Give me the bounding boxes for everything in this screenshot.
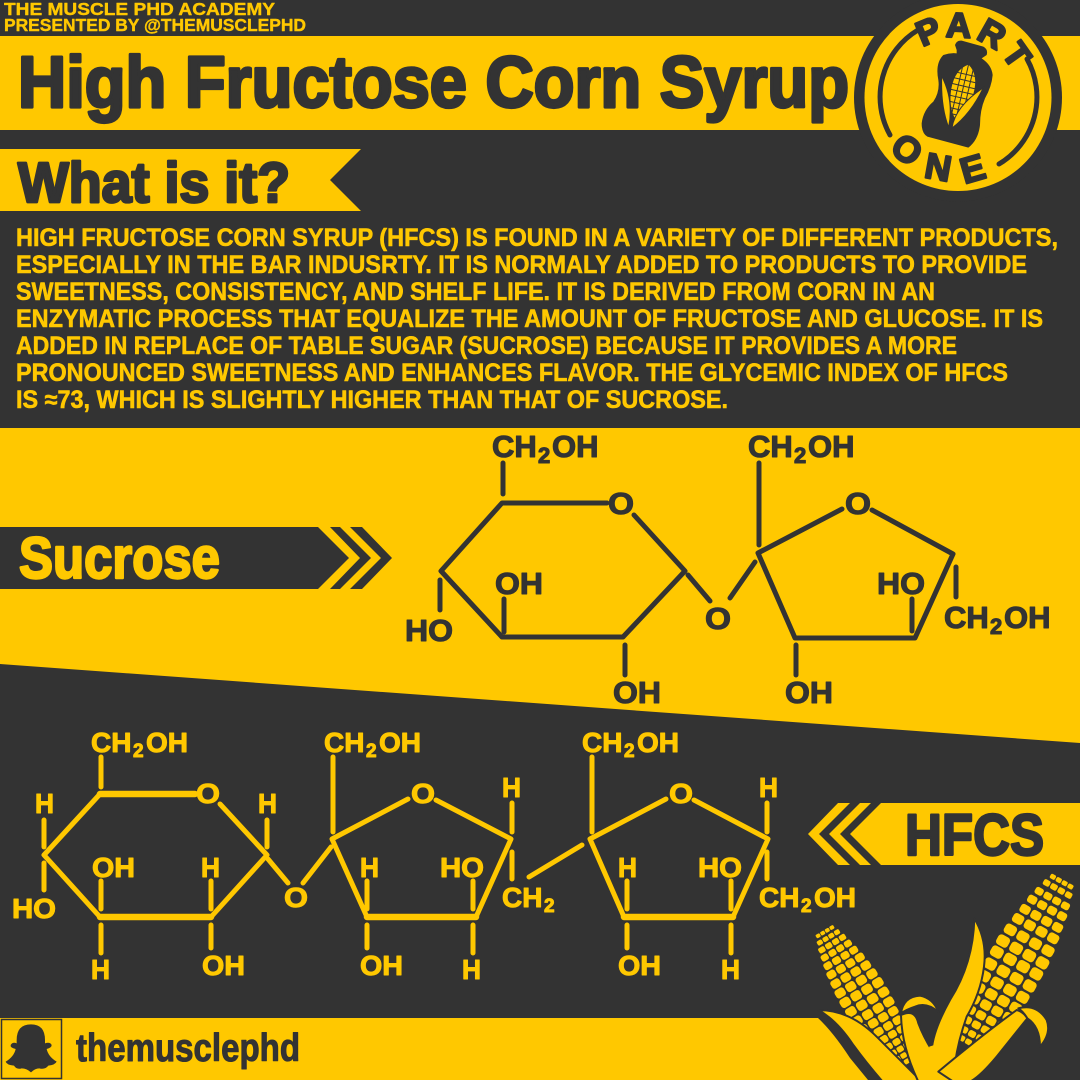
chart: sucrose molecule: OH	[785, 675, 833, 710]
chart: sucrose molecule: O	[705, 601, 731, 636]
chart: hfcs molecule: H	[91, 954, 110, 985]
chart: hfcs molecule: 2	[544, 896, 555, 917]
chart: sucrose molecule: HO	[405, 613, 453, 648]
title: High Fructose Corn Syrup	[18, 43, 849, 123]
text block: description: SWEETNESS, CONSISTENCY, AND SHELF LIFE. IT IS DERIVED FROM CORN IN AN	[16, 278, 935, 306]
chart: sucrose molecule: O	[608, 486, 634, 521]
chart: hfcs molecule: OH	[202, 950, 245, 981]
badge: part one: ONE	[892, 135, 988, 184]
chart: hfcs molecule: OH	[92, 852, 135, 883]
chart: hfcs molecule: O	[669, 778, 693, 809]
chart: hfcs molecule: H	[462, 954, 481, 985]
footer band: snapchat handle	[0, 1018, 868, 1080]
banner: sucrose label	[0, 526, 392, 591]
chart: hfcs molecule: OH	[146, 727, 188, 758]
chart: hfcs molecule: 2	[801, 896, 812, 917]
icon: syrup bottle with corn	[922, 41, 993, 148]
chart: hfcs molecule: CH	[91, 727, 131, 758]
icon: snapchat ghost	[2, 1020, 62, 1078]
chart: hfcs molecule: H	[502, 772, 521, 803]
chart: sucrose molecule: OH	[1004, 600, 1050, 635]
chart: hfcs molecule: 2	[133, 741, 144, 762]
badge: part one	[854, 4, 1062, 191]
panel: sucrose	[0, 428, 1080, 743]
chart: hfcs molecule: 2	[366, 741, 377, 762]
chart: hfcs molecule: H	[35, 788, 54, 819]
right cob	[945, 865, 1080, 1060]
chart: sucrose molecule: OH	[808, 429, 854, 464]
chart: sucrose molecule: HO	[877, 566, 925, 601]
chart: hfcs molecule: OH	[618, 950, 661, 981]
chart: hfcs molecule: CH	[582, 727, 622, 758]
chart: hfcs molecule: OH	[360, 950, 403, 981]
chart: sucrose molecule: 2	[538, 443, 550, 468]
heading: what is it: What is it?	[18, 151, 290, 215]
text block: description: ENZYMATIC PROCESS THAT EQUALIZE THE AMOUNT OF FRUCTOSE AND GLUCOSE. IT IS	[16, 305, 1043, 333]
chart: hfcs molecule: CH	[502, 882, 542, 913]
banner: hfcs label	[808, 803, 1080, 868]
chart: hfcs molecule: CH	[759, 882, 799, 913]
left cob	[803, 917, 926, 1078]
header: academy credit	[4, 0, 306, 35]
chart: sucrose molecule: CH	[748, 429, 793, 464]
text block: description: ESPECIALLY IN THE BAR INDUSRTY. IT IS NORMALY ADDED TO PRODUCTS TO PROVIDE	[16, 251, 1027, 279]
banner: sucrose label: Sucrose	[19, 526, 220, 591]
chart: hfcs molecule: OH	[637, 727, 679, 758]
chart: sucrose molecule	[405, 429, 1050, 710]
chart: hfcs molecule: 2	[624, 741, 635, 762]
text block: description: ADDED IN REPLACE OF TABLE SUGAR (SUCROSE) BECAUSE IT PROVIDES A MORE	[16, 332, 957, 360]
text block: description: PRONOUNCED SWEETNESS AND ENHANCES FLAVOR. THE GLYCEMIC INDEX OF HFCS	[16, 359, 1008, 387]
chart: sucrose molecule: 2	[990, 614, 1002, 639]
chart: hfcs molecule: H	[201, 852, 220, 883]
chart: hfcs molecule	[12, 727, 856, 985]
icon: corn illustration	[803, 865, 1080, 1080]
chart: hfcs molecule: H	[360, 852, 379, 883]
chart: hfcs molecule: OH	[379, 727, 421, 758]
chart: sucrose molecule: OH	[495, 566, 543, 601]
chart: hfcs molecule: CH	[324, 727, 364, 758]
chart: hfcs molecule: O	[411, 778, 435, 809]
chart: hfcs molecule: H	[721, 954, 740, 985]
chart: hfcs molecule: O	[284, 882, 308, 913]
text block: description: IS ≈73, WHICH IS SLIGHTLY HIGHER THAN THAT OF SUCROSE.	[16, 386, 728, 414]
banner: hfcs label: HFCS	[905, 803, 1044, 868]
chart: hfcs molecule: HO	[440, 852, 484, 883]
chart: hfcs molecule: O	[196, 778, 220, 809]
chart: hfcs molecule: H	[258, 788, 277, 819]
chart: hfcs molecule: OH	[814, 882, 856, 913]
badge: part one: PART	[914, 12, 1034, 66]
handle text: themusclephd	[76, 1027, 300, 1070]
husk leaves	[818, 918, 1048, 1080]
text block: description	[16, 224, 1058, 414]
chart: sucrose molecule: OH	[552, 429, 598, 464]
header: academy credit: PRESENTED BY @THEMUSCLEPHD	[4, 15, 306, 35]
chart: hfcs molecule: HO	[12, 893, 56, 924]
chart: sucrose molecule: CH	[944, 600, 989, 635]
chart: hfcs molecule: H	[618, 852, 637, 883]
chart: sucrose molecule: 2	[794, 443, 806, 468]
title band	[0, 36, 1080, 130]
chart: sucrose molecule: OH	[613, 675, 661, 710]
chart: hfcs molecule: HO	[698, 852, 742, 883]
chart: hfcs molecule: H	[759, 772, 778, 803]
chart: sucrose molecule: O	[845, 486, 871, 521]
chart: sucrose molecule: CH	[492, 429, 537, 464]
